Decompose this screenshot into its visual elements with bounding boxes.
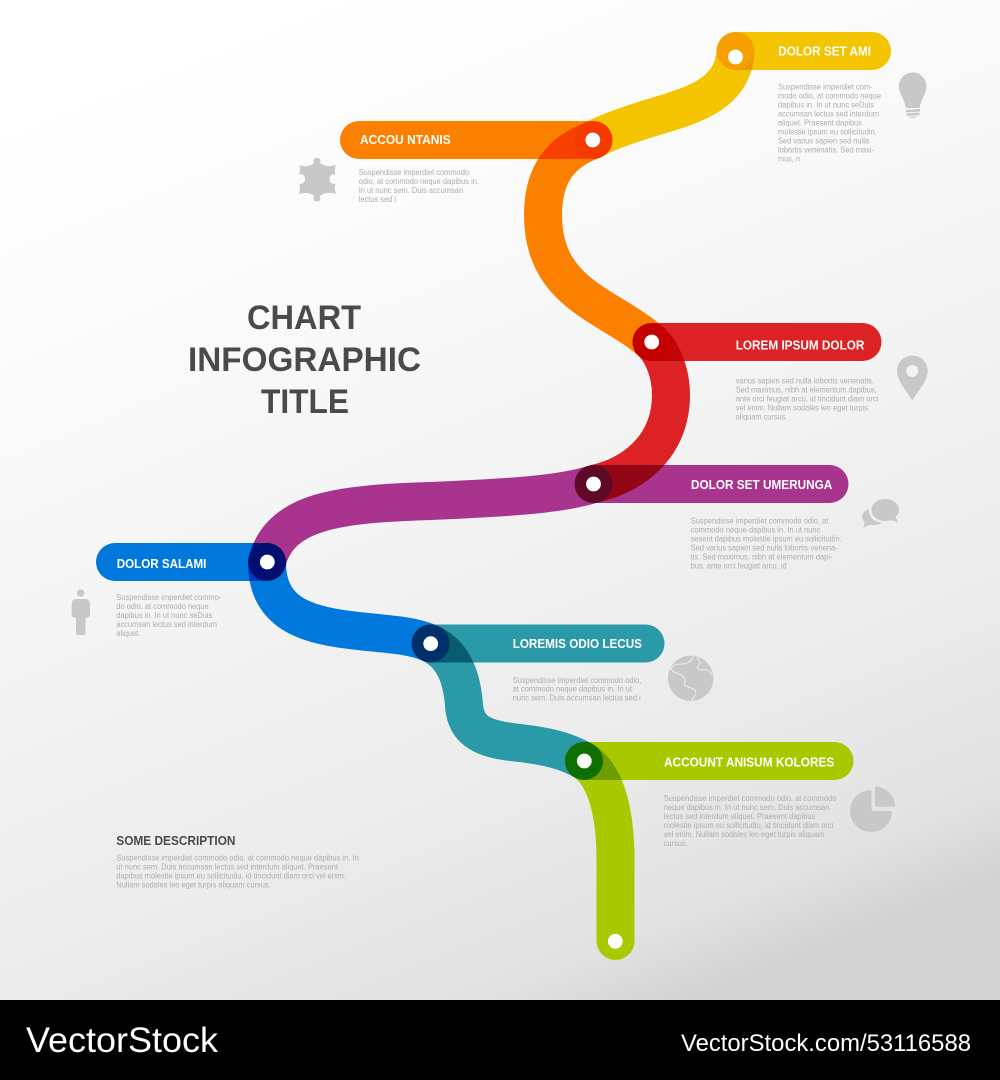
body text [778,82,882,164]
title [188,299,421,421]
timeline nodes [248,32,754,949]
body text: accumsan lectus sed interdum [116,620,217,629]
red ribbon [594,342,671,484]
body text: aliquet. Praesent dapibus [778,118,862,128]
node 6 [412,624,450,662]
body text: accumsan lectus sed interdum [778,110,879,118]
body text: ante orci feugiat arcu, id tincidunt diam orci [736,394,879,404]
body text: dapibus in. In ut nunc seDuis [116,611,212,620]
yellow label pill [717,32,891,70]
body text: vel enim. Nullam sodales leo eget turpis aliquam [664,830,825,839]
orange ribbon [543,140,652,342]
description text: dapibus molestie ipsum eu sollicitudiu, id tincidunt diam orci vel enim. [116,871,346,880]
icon: light bulb [899,72,926,118]
body text: In ut nunc sem. Duis accumsan [359,186,463,195]
body text: Suspendisse imperdiet commo- [116,593,222,602]
body text: Suspendisse imperdiet commodo [359,168,470,177]
description text: ut nunc sem. Duis accumsan lectus sed interdum aliquet. Praesent [116,862,339,872]
step: dolor salami [72,556,222,638]
end dot [608,934,623,949]
heading: DOLOR SALAMI [117,556,206,571]
body text: vel enim. Nullam sodales leo eget turpis [736,404,868,412]
teal label pill [412,624,664,662]
body text [359,168,479,204]
body text: Suspendisse imperdiet com- [778,82,873,92]
step: accou ntanis [299,132,479,204]
teal ribbon [430,644,584,761]
body text: Suspendisse imperdiet commodo odio, [513,676,641,685]
body text: do odio, at commodo neque [116,602,209,611]
body text [513,676,641,702]
body text: odio, at commodo neque dapibus in. [359,177,479,186]
body text: Sed maximus, nibh at elementum dapibus, [736,386,877,394]
body text: sesent dapibus molestie ipsum eu sollicitudin. [691,534,842,544]
body text [691,516,842,570]
body text [664,794,837,848]
body text: nunc sem. Duis accumsan lectus sed i [513,694,641,702]
body text: commodo neque dapibus in. In ut nunc [691,526,820,534]
title: TITLE [261,383,349,421]
icon: globe [668,656,713,701]
icon: person [72,589,90,635]
yellow ribbon [593,51,736,140]
heading: LOREMIS ODIO LECUS [513,636,642,651]
body text: lectus sed interdum aliquet. Praesent dapibus [664,812,815,821]
node 1 [716,32,754,70]
icon: pie chart [850,786,895,832]
body text: dapibus in. In ut nunc seDuis [778,100,874,110]
body text: modo odio, at commodo neque [778,92,882,100]
body text: mus, n [778,154,800,164]
node 7 [565,742,603,780]
body text: Suspendisse imperdiet commodo odio, at [691,516,829,526]
body text: lectus sed i [359,195,396,204]
step: lorem ipsum dolor [736,337,928,422]
icon: map pin [897,356,928,400]
heading: ACCOU NTANIS [360,132,451,147]
body text: lobortis venenatis. Sed maxi- [778,146,874,154]
description heading: SOME DESCRIPTION [116,834,236,848]
purple label pill [575,465,848,503]
step: dolor set ami [778,43,926,163]
body text [116,593,222,638]
body text: at commodo neque dapibus in. In ut [513,685,633,694]
body text: tis. Sed maximus, nibh at elementum dapi- [691,552,833,562]
ribbon timeline [96,32,891,941]
body text: cursus. [664,839,688,848]
body text [736,376,879,422]
node 2 [574,121,612,159]
heading: DOLOR SET AMI [778,43,871,58]
red label pill [632,323,882,361]
description block [116,834,359,890]
node 3 [632,323,670,361]
step: account anisum kolores [664,754,895,848]
node 4 [574,465,612,503]
body text: bus, ante orci feugiat arcu, id [691,562,787,570]
green label pill [566,742,854,780]
title: CHART [247,299,361,337]
body text: aliquet. [116,629,140,638]
body text: molestie ipsum eu sollicitudiu, id tincidunt diam orci [664,821,834,830]
icon: puzzle piece [299,158,336,202]
body text: Sed varius sapien sed nulla lobortis venena- [691,544,838,552]
green ribbon [584,761,616,941]
purple ribbon [267,484,594,562]
description text [116,854,359,890]
body text: neque dapibus in. In ut nunc sem. Duis accumsan [664,803,829,812]
body text: aliquam cursus. [736,412,787,422]
blue ribbon [267,562,430,644]
orange label pill [340,121,612,159]
heading: LOREM IPSUM DOLOR [736,337,865,352]
blue label pill [96,543,286,581]
body text: Sed varius sapien sed nulla [778,136,870,146]
heading: DOLOR SET UMERUNGA [691,477,833,492]
node 5 [248,543,286,581]
description text: Nullam sodales leo eget turpis aliquam cursus. [116,880,271,890]
title: INFOGRAPHIC [188,341,421,379]
body text: molestie ipsum eu sollicitudin. [778,128,877,136]
footer id: VectorStock.com/53116588 [681,1030,971,1057]
footer bar [0,1000,1000,1080]
icon: chat bubbles [862,499,899,528]
body text: Suspendisse imperdiet commodo odio, at commodo [664,794,837,803]
step: loremis odio lecus [513,636,713,702]
body text: varius sapien sed nulla lobortis venenatis. [736,376,874,386]
footer logo: VectorStock [26,1021,219,1060]
heading: ACCOUNT ANISUM KOLORES [664,754,835,769]
description text: Suspendisse imperdiet commodo odio, at commodo neque dapibus in. In [116,854,359,862]
step: dolor set umerunga [691,477,899,570]
